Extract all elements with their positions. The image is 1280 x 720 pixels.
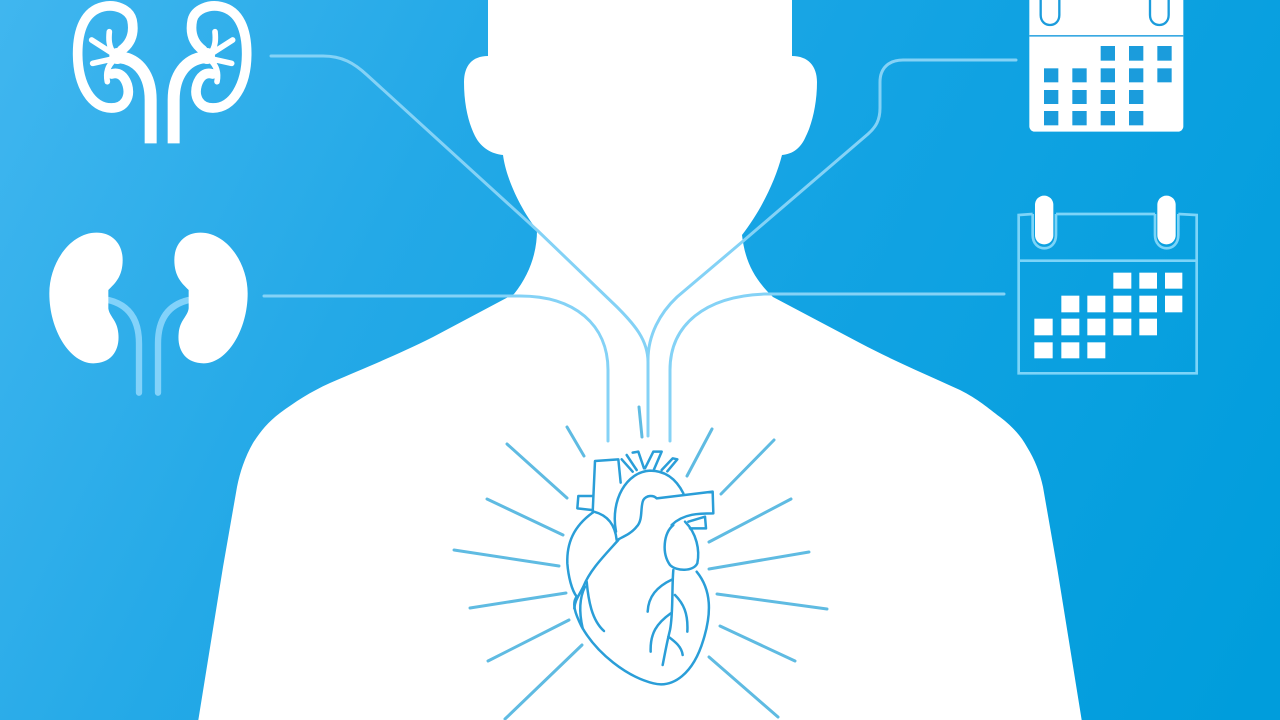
vein stub	[577, 496, 593, 510]
left coronary branches	[580, 582, 604, 631]
top branch vessels	[622, 452, 677, 472]
calendar rings	[1035, 196, 1176, 244]
icon: kidneys solid	[49, 233, 248, 393]
connector: upper calendar to heart	[648, 60, 1016, 360]
calendar body	[1029, 0, 1183, 132]
calendar frame	[1019, 214, 1197, 373]
calendar header line	[1029, 35, 1183, 37]
calendar day squares	[1034, 273, 1182, 358]
left atrium	[665, 522, 698, 570]
left outlined kidney	[78, 6, 151, 143]
right solid kidney with ureter	[158, 233, 248, 393]
heart groove	[574, 540, 618, 608]
connector: lower calendar to heart	[670, 294, 1004, 441]
right coronary branches	[648, 570, 687, 665]
calendar rings	[1041, 0, 1169, 25]
calendar day squares	[1044, 46, 1172, 125]
connector: lower kidney to heart	[264, 296, 608, 441]
pulmonary artery	[618, 492, 713, 539]
radiating rays around heart	[454, 407, 827, 719]
icon: outlined calendar	[1019, 196, 1197, 373]
superior vena cava	[593, 459, 621, 513]
body silhouette	[198, 0, 1082, 720]
left solid kidney with ureter	[49, 233, 139, 393]
right atrium	[567, 512, 617, 597]
ventricle outline	[574, 572, 709, 684]
icon: solid calendar	[1029, 0, 1183, 132]
icon: anatomical heart	[567, 452, 713, 684]
connector: upper kidney to heart	[271, 56, 648, 436]
right outlined kidney	[174, 6, 247, 143]
small right vessel	[688, 517, 706, 528]
icon: kidneys outline	[78, 6, 247, 143]
aortic arch	[615, 471, 683, 532]
calendar ring sockets	[1033, 214, 1178, 248]
